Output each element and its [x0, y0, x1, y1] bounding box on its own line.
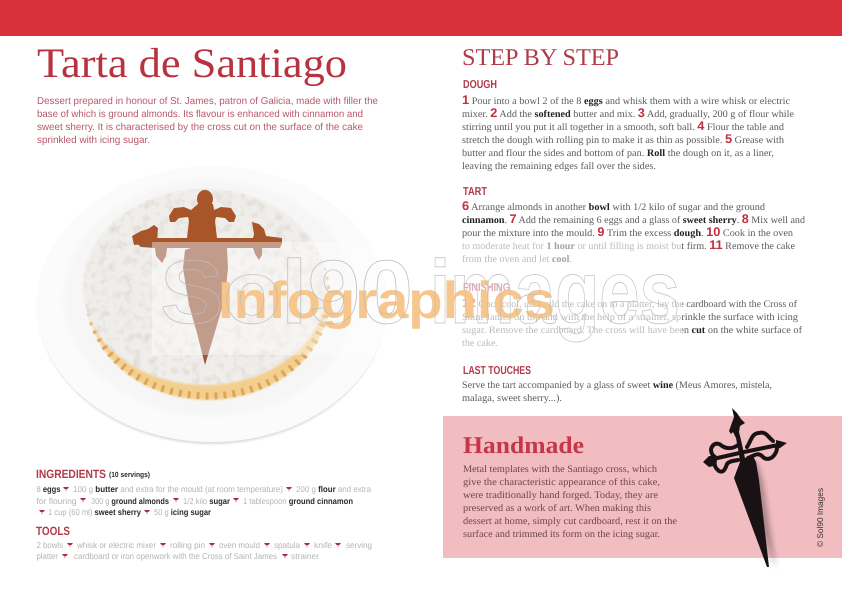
section: dough — [462, 79, 795, 172]
tart steps: 6 Arrange almonds in another bowl with 1/2 kilo of sugar and the ground — [462, 199, 765, 213]
tart steps: from the oven and let cool. — [462, 254, 572, 265]
ingredients heading: (10 servings) — [109, 470, 150, 479]
plate — [37, 166, 387, 444]
tools list: 2 bowls — [36, 540, 63, 550]
finishing steps: Saint James on top and with the help of a strainer, sprinkle the surface with icing — [462, 312, 798, 323]
dough steps: stirring until you put it all together in a smooth, soft ball. 4 Flour the table and — [462, 119, 784, 133]
icon: iron cross of Saint James — [703, 408, 787, 569]
handmade text — [463, 464, 678, 540]
tools list: rolling pin — [170, 540, 205, 550]
tart crust — [88, 198, 328, 400]
panel: handmade — [443, 416, 842, 558]
last touches heading: LAST TOUCHES — [463, 365, 531, 377]
dough steps: 1 Pour into a bowl 2 of the 8 eggs and whisk them with a wire whisk or electric — [462, 93, 791, 107]
watermark: Infographics: Infographics — [218, 272, 555, 330]
panel background — [443, 416, 842, 558]
top red band — [0, 0, 842, 36]
dough steps: leaving the remaining edges fall over the sides. — [462, 161, 656, 172]
intro text block: sprinkled with icing sugar. — [37, 135, 150, 146]
tools list: spatula — [274, 540, 300, 550]
ingredients list: 200 g flour and extra — [296, 484, 371, 494]
watermark: Sol90images: Sol90 — [160, 243, 413, 343]
arm tips — [703, 440, 787, 467]
tart steps: cinnamon. 7 Add the remaining 6 eggs and a glass of sweet sherry. 8 Mix well and — [462, 212, 805, 226]
tools list: serving — [346, 540, 372, 550]
intro text block: sweet sherry. It is characterised by the cross cut on the surface of the cake — [37, 122, 363, 133]
tools list: platter — [36, 551, 58, 561]
tools list: knife — [314, 540, 332, 550]
tart steps: pour the mixture into the mould. 9 Trim the excess dough. 10 Cook in the oven — [462, 225, 793, 239]
ingredients list: 8 eggs — [36, 484, 61, 494]
tools list: strainer — [291, 551, 319, 561]
watermark — [152, 242, 682, 355]
section: finishing — [462, 282, 803, 349]
sugar surface — [83, 189, 327, 385]
last touches text: malaga, sweet sherry...). — [462, 393, 562, 404]
cross blade and lower arms — [136, 243, 282, 365]
credit: © Sol90 Images — [815, 488, 825, 547]
watermark veil — [152, 242, 682, 355]
tart heading: TART — [463, 186, 487, 198]
ingredients heading: INGREDIENTS — [36, 467, 106, 481]
step by step heading: STEP BY STEP — [462, 45, 619, 71]
sugar texture — [83, 189, 327, 385]
handmade heading: Handmade — [463, 433, 584, 459]
dough steps: mixer. 2 Add the softened butter and mix. 3 Add, gradually, 200 g of flour while — [462, 106, 795, 120]
dough steps — [462, 93, 795, 172]
ingredients list: 100 g butter and extra for the mould (at room temperature) — [73, 484, 283, 494]
photo: tart on a white plate — [37, 166, 387, 444]
blade, spade and stem — [729, 408, 769, 567]
intro text block — [37, 96, 378, 146]
ingredients list: 1 tablespoon ground cinnamon — [243, 496, 353, 506]
finishing steps: 12 Once cool, unmould the cake on to a platter, lay the cardboard with the Cross of — [462, 296, 798, 310]
watermark veil over text — [440, 242, 682, 355]
finishing heading: FINISHING — [463, 282, 510, 294]
handmade text: preserved as a work of art. When making this — [463, 503, 651, 514]
intro text block: base of which is ground almonds. Its flavour is enhanced with cinnamon and — [37, 109, 363, 120]
handmade text: Metal templates with the Santiago cross, which — [463, 464, 657, 475]
title: Tarta de Santiago — [37, 41, 347, 87]
tools list — [36, 540, 372, 561]
tart steps: to moderate heat for 1 hour or until filling is moist but firm. 11 Remove the cake — [462, 238, 796, 252]
section: tart — [462, 186, 805, 265]
ingredients list — [36, 484, 371, 517]
dough steps: stretch the dough with rolling pin to make it as thin as possible. 5 Grease with — [462, 132, 784, 146]
cross head — [132, 190, 282, 245]
watermark: Sol90images: images — [430, 243, 680, 343]
handmade text: give the characteristic appearance of this cake, — [463, 477, 660, 488]
tools list: whisk or electric mixer — [76, 540, 156, 550]
finishing steps: sugar. Remove the cardboard. The cross will have been cut on the white surface of — [462, 325, 803, 336]
tart steps — [462, 199, 805, 265]
cross shadow — [741, 462, 776, 569]
intro text block: Dessert prepared in honour of St. James, patron of Galicia, made with filler the — [37, 96, 378, 107]
ingredients list: 1 cup (60 ml) sweet sherry — [48, 507, 141, 517]
cross of Saint James cut in the sugar — [132, 190, 282, 365]
tools list: oven mould — [219, 540, 260, 550]
watermark: Sol90images — [160, 243, 680, 343]
last touches text — [462, 380, 772, 404]
ingredients list: 1/2 kilo sugar — [183, 496, 231, 506]
icons: ingredient separators — [39, 487, 292, 515]
ingredients list: 300 g ground almonds — [91, 496, 169, 506]
dough steps: butter and flour the sides and bottom of pan. Roll the dough on it, as a liner, — [462, 148, 774, 159]
handmade text: were traditionally hand forged. Today, they are — [463, 490, 659, 501]
ingredients list: 50 g icing sugar — [154, 507, 212, 517]
tools heading: TOOLS — [36, 524, 70, 538]
section: last touches — [462, 365, 772, 404]
icons: tool separators — [62, 543, 341, 559]
last touches text: Serve the tart accompanied by a glass of sweet wine (Meus Amores, mistela, — [462, 380, 772, 391]
dough heading: DOUGH — [463, 79, 497, 91]
finishing steps — [462, 296, 803, 349]
arms with curls — [711, 433, 778, 472]
handmade text: dessert at home, simply cut cardboard, rest it on the — [463, 516, 678, 527]
finishing steps: the cake. — [462, 338, 498, 349]
tools list: cardboard or iron openwork with the Cross of Saint James — [74, 551, 277, 561]
handmade text: surface and trimmed its form on the icing sugar. — [463, 529, 660, 540]
ingredients list: for flouring — [36, 496, 77, 506]
